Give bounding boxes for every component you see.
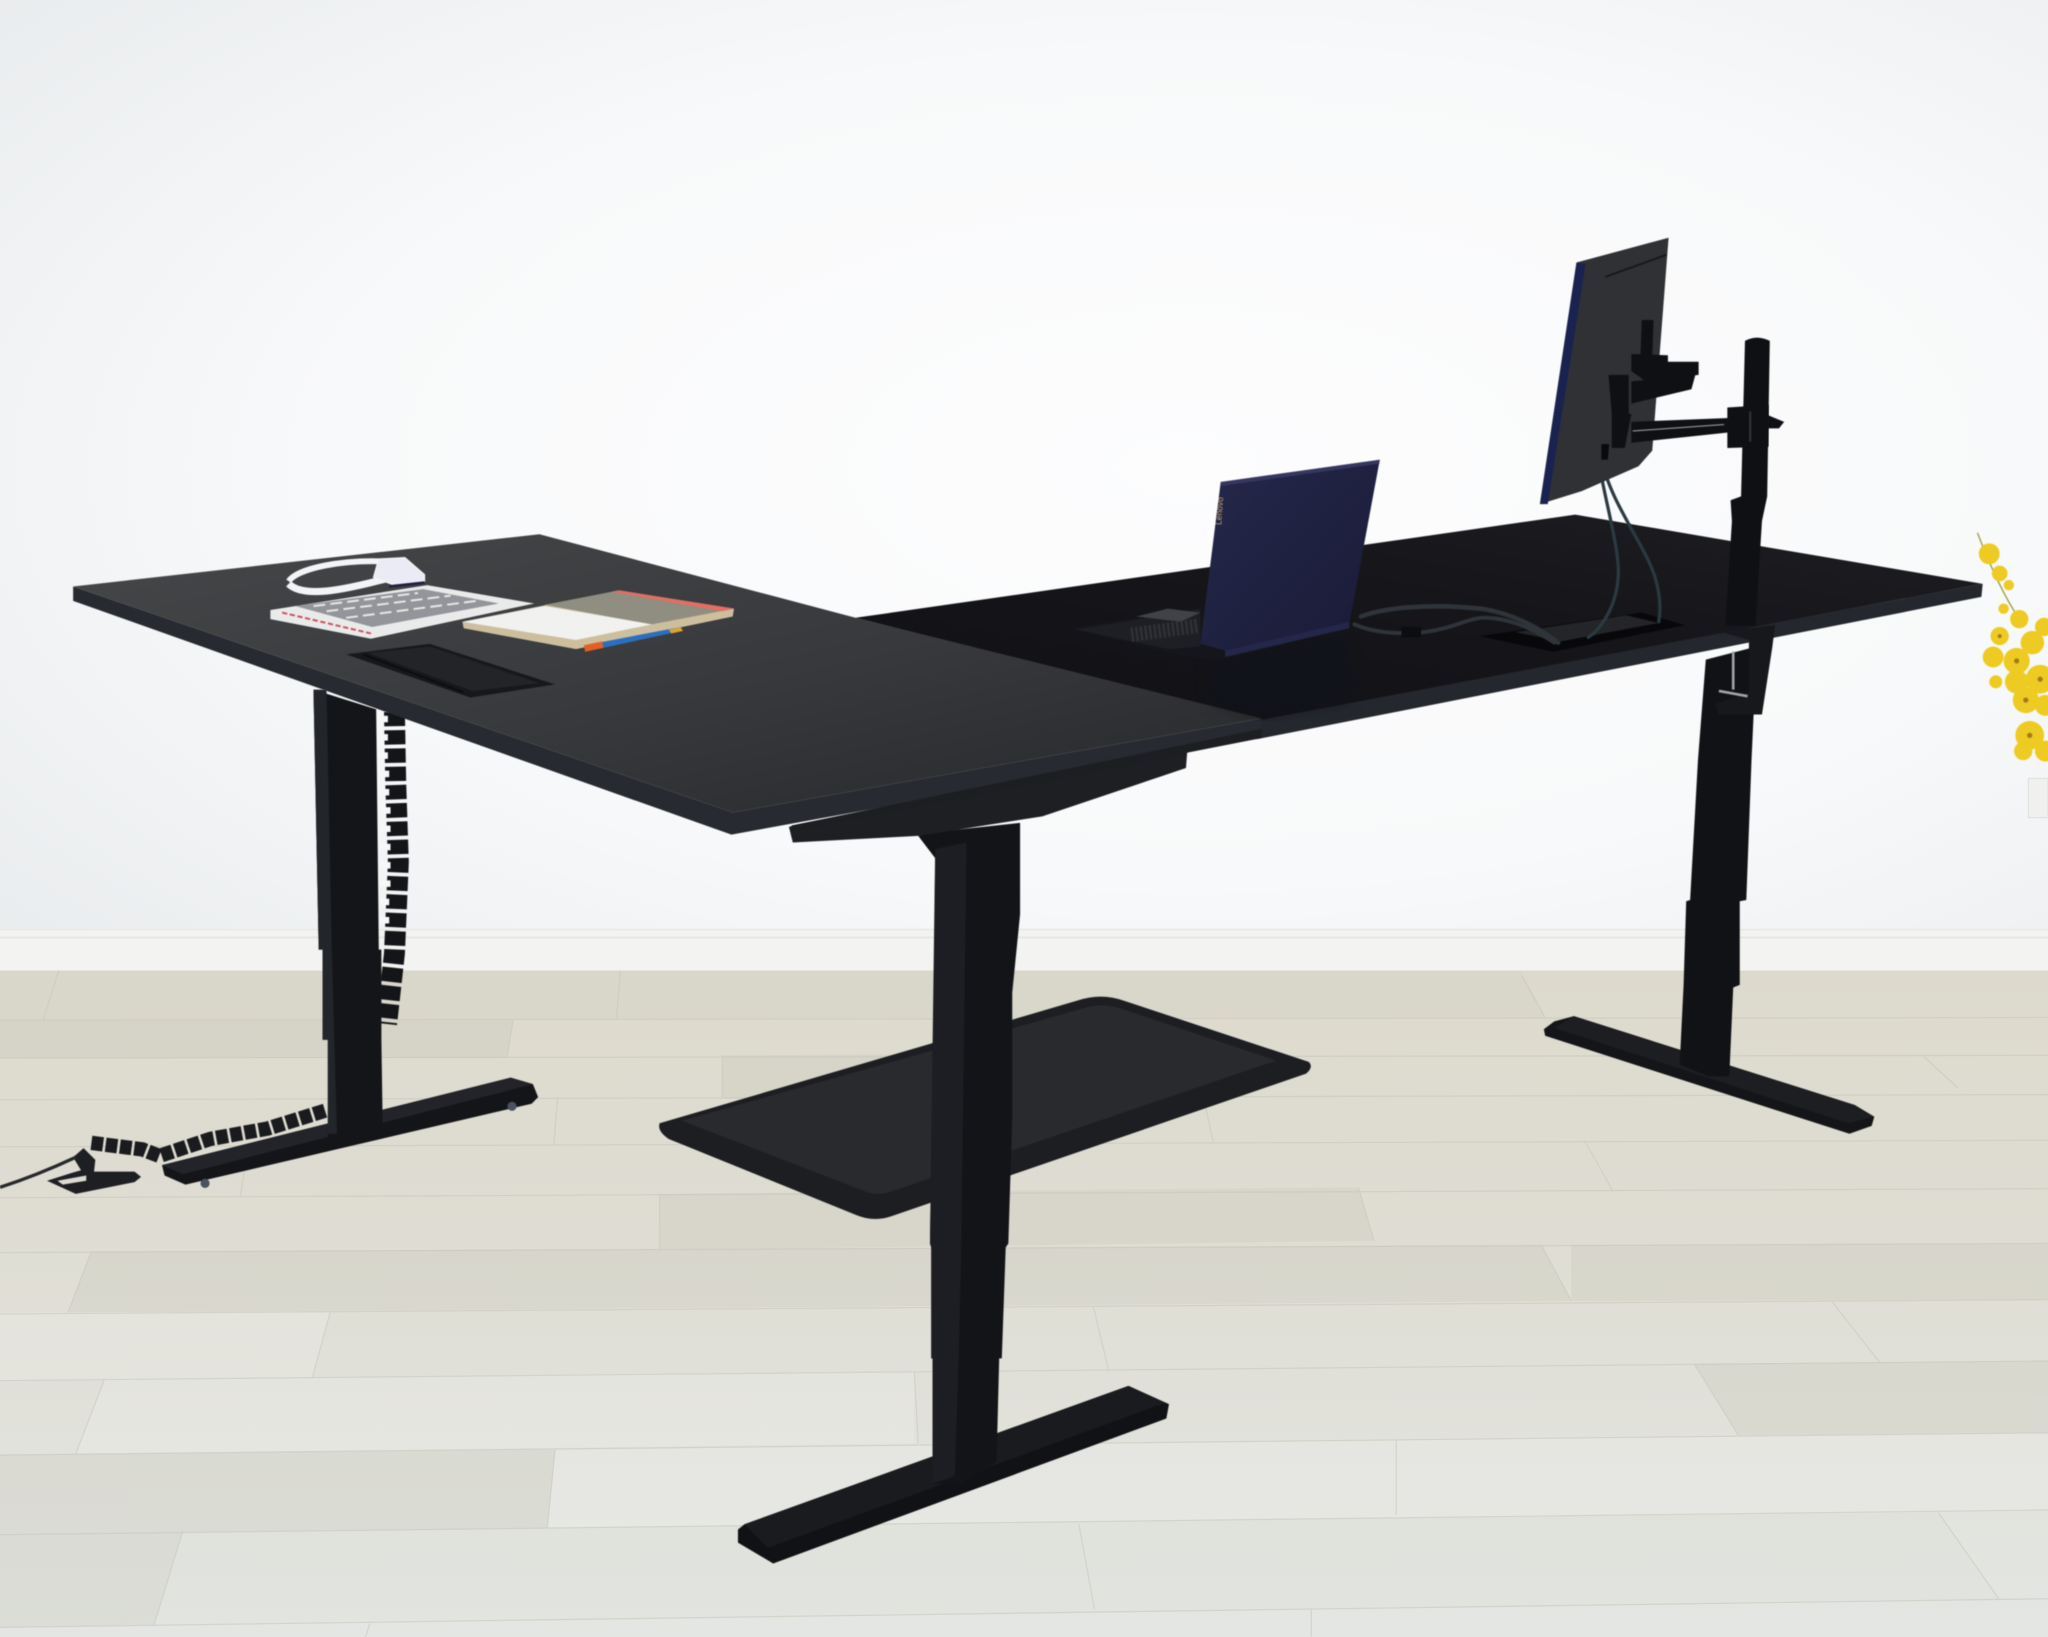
right wing edge	[1256, 584, 1983, 739]
laptop lid	[1200, 460, 1380, 650]
laptop logo: Lenovo	[1213, 497, 1225, 525]
wall outlet	[2028, 778, 2048, 818]
pencil	[585, 627, 682, 652]
wire grommet left	[346, 644, 555, 697]
laptop and monitor cables	[1354, 457, 1660, 643]
right wire grommet	[1480, 613, 1685, 652]
wood floor	[0, 970, 2048, 1637]
left desk items	[270, 558, 734, 697]
monitor	[1540, 238, 1784, 504]
cable chain on floor	[91, 1110, 327, 1156]
desktop	[73, 515, 1983, 835]
center leg	[738, 751, 1187, 1563]
cable chain vertical	[377, 712, 398, 1024]
cable bracket	[47, 1148, 141, 1194]
laptop reflection	[1208, 635, 1349, 713]
right wing top	[856, 515, 1983, 720]
table clamp	[1714, 625, 1775, 714]
right leg	[1544, 647, 1874, 1134]
left leg and cable chain	[0, 690, 538, 1194]
wall	[0, 0, 2048, 973]
laptop base	[1067, 609, 1348, 661]
book	[462, 590, 734, 649]
center foot	[738, 1386, 1169, 1563]
right foot	[1544, 1016, 1874, 1134]
left foot	[162, 1078, 538, 1185]
left wing top	[73, 534, 1262, 812]
right leg column	[1680, 647, 1757, 1076]
anti-fatigue floor mat	[659, 997, 1311, 1219]
desk frame bracket	[789, 751, 1187, 842]
left wing edge	[73, 586, 1262, 835]
left leg column	[313, 690, 383, 1139]
baseboard	[0, 929, 2048, 972]
center leg column	[918, 823, 1020, 1484]
monitor mount arm	[1608, 320, 1784, 448]
white headset	[289, 558, 424, 592]
magazine	[270, 585, 534, 639]
power cord	[0, 1157, 76, 1187]
yellow flowers	[1977, 533, 2048, 761]
monitor back	[1540, 238, 1669, 504]
monitor arm pole and clamp	[1714, 338, 1775, 714]
monitor bezel	[1540, 263, 1586, 504]
pole	[1725, 338, 1770, 626]
laptop	[1067, 460, 1380, 661]
